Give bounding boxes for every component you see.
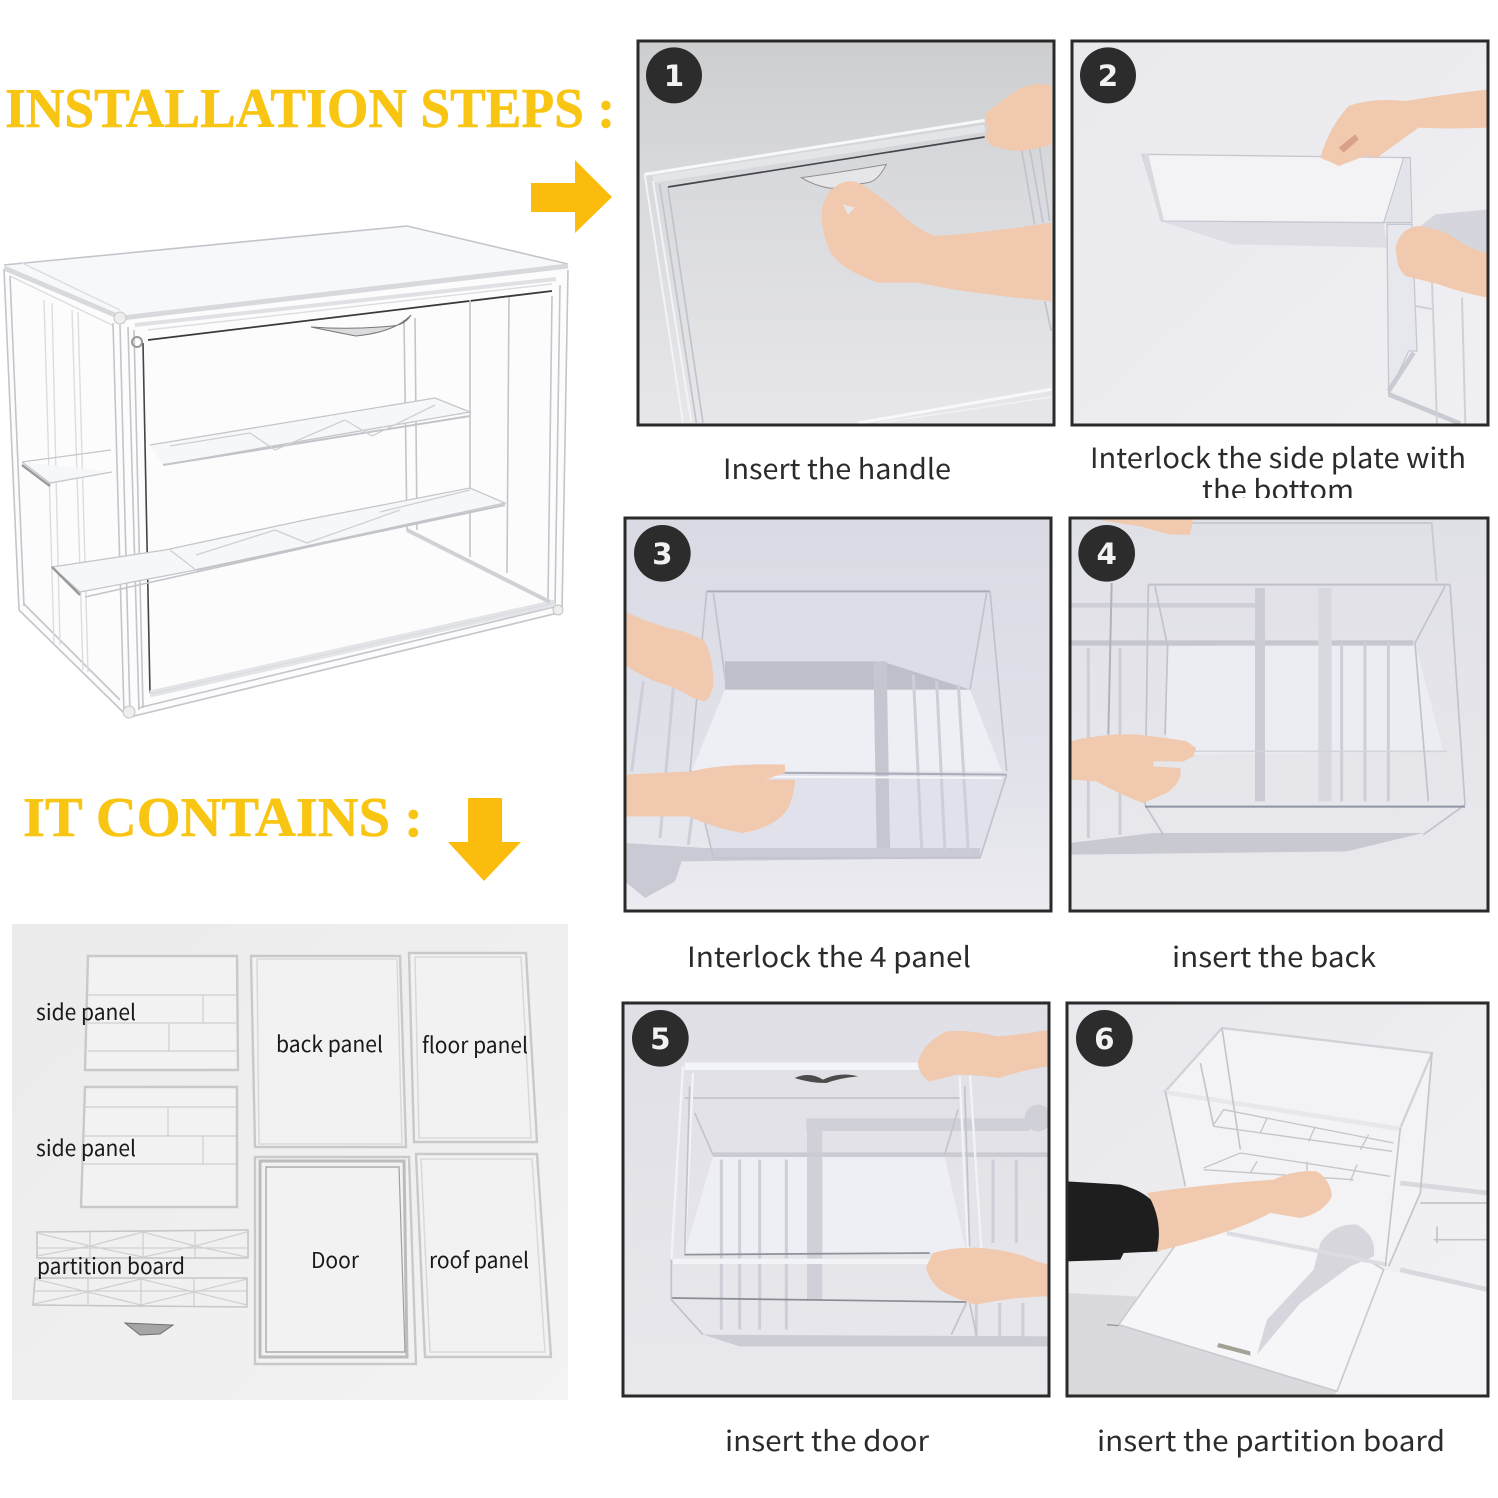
- part: side panel two: [36, 1087, 237, 1207]
- hand: lower right: [926, 1248, 1049, 1305]
- part: floor panel: floor panel: [422, 1028, 528, 1060]
- sleeve: [1067, 1181, 1162, 1261]
- label: step 2: [1060, 437, 1490, 516]
- assembled clear box product photo: [4, 226, 568, 718]
- step 2 panel: [1072, 41, 1488, 425]
- part: roof panel: [416, 1154, 551, 1357]
- part: side panel one: [36, 956, 238, 1070]
- step 5 panel: [623, 1003, 1051, 1396]
- panel: parts photo: [12, 924, 568, 1400]
- step number 1: [646, 47, 702, 103]
- arrow: pointing down to parts: [448, 798, 521, 881]
- part: side panel one: side panel: [36, 995, 136, 1027]
- hand: top right: [918, 1030, 1049, 1081]
- step number 4: 4: [1096, 537, 1117, 571]
- hand: lower left: [1070, 734, 1196, 803]
- step 4 panel: [1070, 518, 1488, 911]
- label: step 6: insert the partition board: [1097, 1420, 1445, 1460]
- label: step 1: Insert the handle: [723, 448, 951, 488]
- hand: holding frame: [986, 84, 1051, 151]
- step number 4: [1078, 525, 1135, 582]
- hand: holding handle: [822, 181, 1051, 301]
- part: floor panel: [409, 953, 537, 1142]
- hand: top holding tray: [1320, 89, 1488, 166]
- part: handle: [125, 1323, 173, 1335]
- label: step 3: Interlock the 4 panel: [687, 936, 971, 976]
- step 3 panel: [625, 518, 1051, 911]
- label: step 5: insert the door: [725, 1420, 929, 1460]
- step number 3: 3: [652, 537, 673, 571]
- part: side panel two: side panel: [36, 1131, 136, 1163]
- step number 5: 5: [650, 1022, 671, 1056]
- part: partition boards: [33, 1230, 248, 1307]
- step number 6: [1076, 1010, 1133, 1067]
- part: door: Door: [311, 1243, 359, 1275]
- part: back panel: back panel: [276, 1027, 383, 1059]
- hand: lower left: [625, 764, 795, 833]
- heading: it contains: IT CONTAINS :: [23, 787, 423, 849]
- step number 6: 6: [1094, 1022, 1115, 1056]
- hand: holding side plate: [1395, 226, 1488, 298]
- hand: top: [1087, 518, 1193, 535]
- label: step 4: insert the back: [1172, 936, 1377, 976]
- label: step 2: the bottom: [1202, 469, 1354, 509]
- part: back panel: [251, 956, 406, 1147]
- arm reaching to partition: [1147, 1171, 1332, 1251]
- part: roof panel: roof panel: [429, 1243, 529, 1275]
- step number 1: 1: [664, 59, 684, 93]
- part: door: [255, 1157, 416, 1364]
- step 6 panel: [1067, 1003, 1488, 1396]
- step number 3: [634, 525, 691, 582]
- handle: [795, 1074, 858, 1083]
- handle: [801, 164, 886, 188]
- step number 5: [632, 1010, 689, 1067]
- step number 2: 2: [1098, 59, 1118, 93]
- label: step 2: Interlock the side plate with: [1090, 437, 1466, 477]
- step number 2: [1080, 47, 1136, 103]
- title: installation steps: INSTALLATION STEPS :: [5, 78, 615, 140]
- part: partition boards: partition board: [37, 1249, 185, 1281]
- arrow: pointing right to steps: [531, 160, 612, 233]
- step 1 panel: [638, 41, 1054, 425]
- door handle: [1217, 1343, 1250, 1356]
- hand: upper left: [625, 611, 713, 701]
